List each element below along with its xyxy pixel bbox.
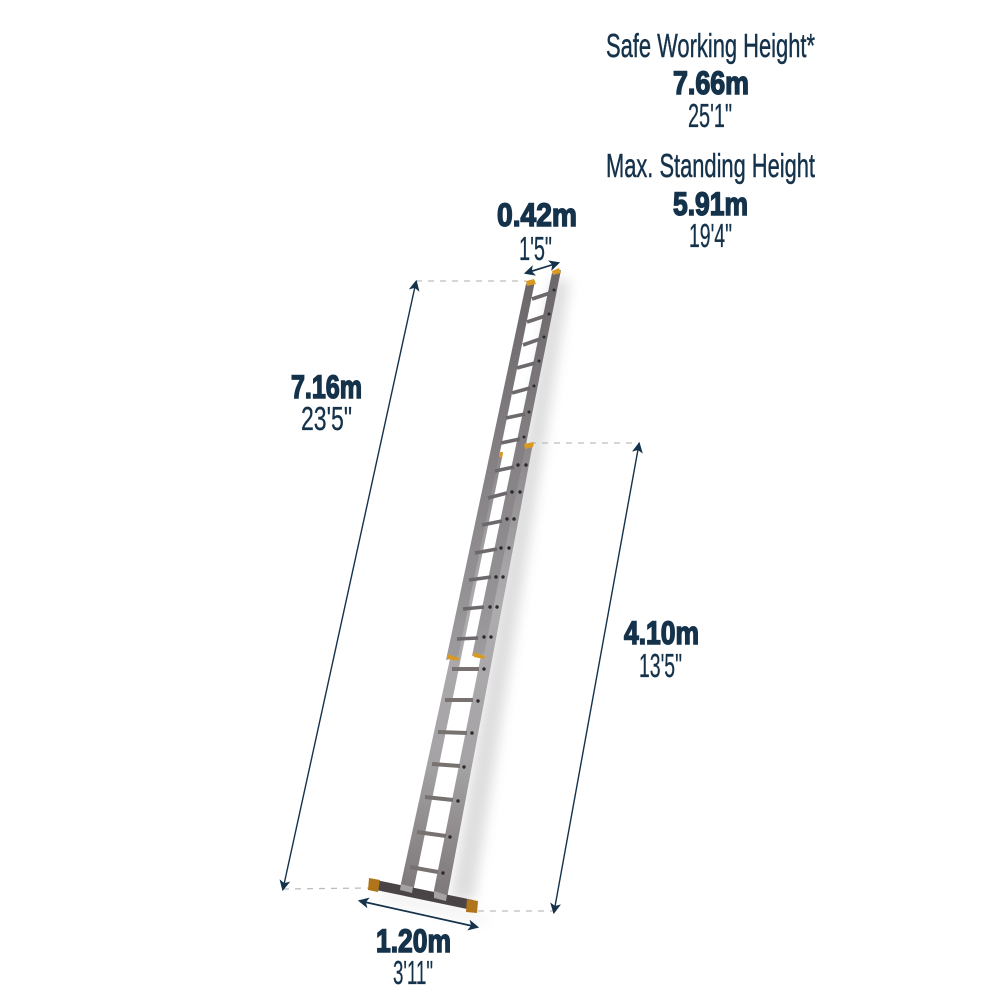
base section rungs [410, 669, 479, 872]
arrow: 4.10m closed length [554, 444, 639, 912]
label: width: 0.42m [497, 197, 577, 233]
label: extended length: 23'5" [301, 400, 352, 437]
heading: safe working height [606, 27, 815, 134]
label: stabiliser width: 3'11" [393, 954, 433, 991]
extension ladder [368, 268, 561, 913]
heading: safe working height: Safe Working Height* [606, 27, 815, 64]
stabiliser bar [376, 880, 473, 910]
heading: max standing height: 19'4" [689, 217, 732, 254]
rail rivets [441, 288, 556, 875]
label: width [497, 197, 577, 267]
label: width: 1'5" [519, 230, 552, 267]
fly section rails [446, 270, 561, 660]
arrow: 0.42m width [526, 263, 558, 273]
yellow end caps [447, 268, 561, 661]
base rail feet [400, 884, 447, 901]
label: stabiliser width: 1.20m [376, 923, 451, 959]
heading: max standing height [606, 147, 815, 254]
label: closed length: 13'5" [639, 647, 682, 684]
arrow: 7.16m length [283, 282, 416, 889]
fly section rungs [457, 293, 550, 639]
label: closed length: 4.10m [624, 615, 699, 651]
label: extended length [291, 369, 362, 437]
label: stabiliser width [376, 923, 451, 991]
heading: safe working height: 7.66m [673, 65, 749, 101]
stabiliser foot right [466, 899, 478, 913]
label: closed length [624, 615, 699, 684]
stabiliser foot left [368, 878, 380, 892]
label: extended length: 7.16m [291, 369, 362, 405]
heading: max standing height: Max. Standing Height [606, 147, 815, 184]
dimension guide lines [283, 281, 639, 911]
heading: max standing height: 5.91m [673, 186, 748, 222]
ladder shadow [380, 280, 570, 924]
base section rails [400, 443, 533, 898]
heading: safe working height: 25'1" [688, 97, 732, 134]
arrow: 1.20m stabiliser width [360, 901, 477, 927]
